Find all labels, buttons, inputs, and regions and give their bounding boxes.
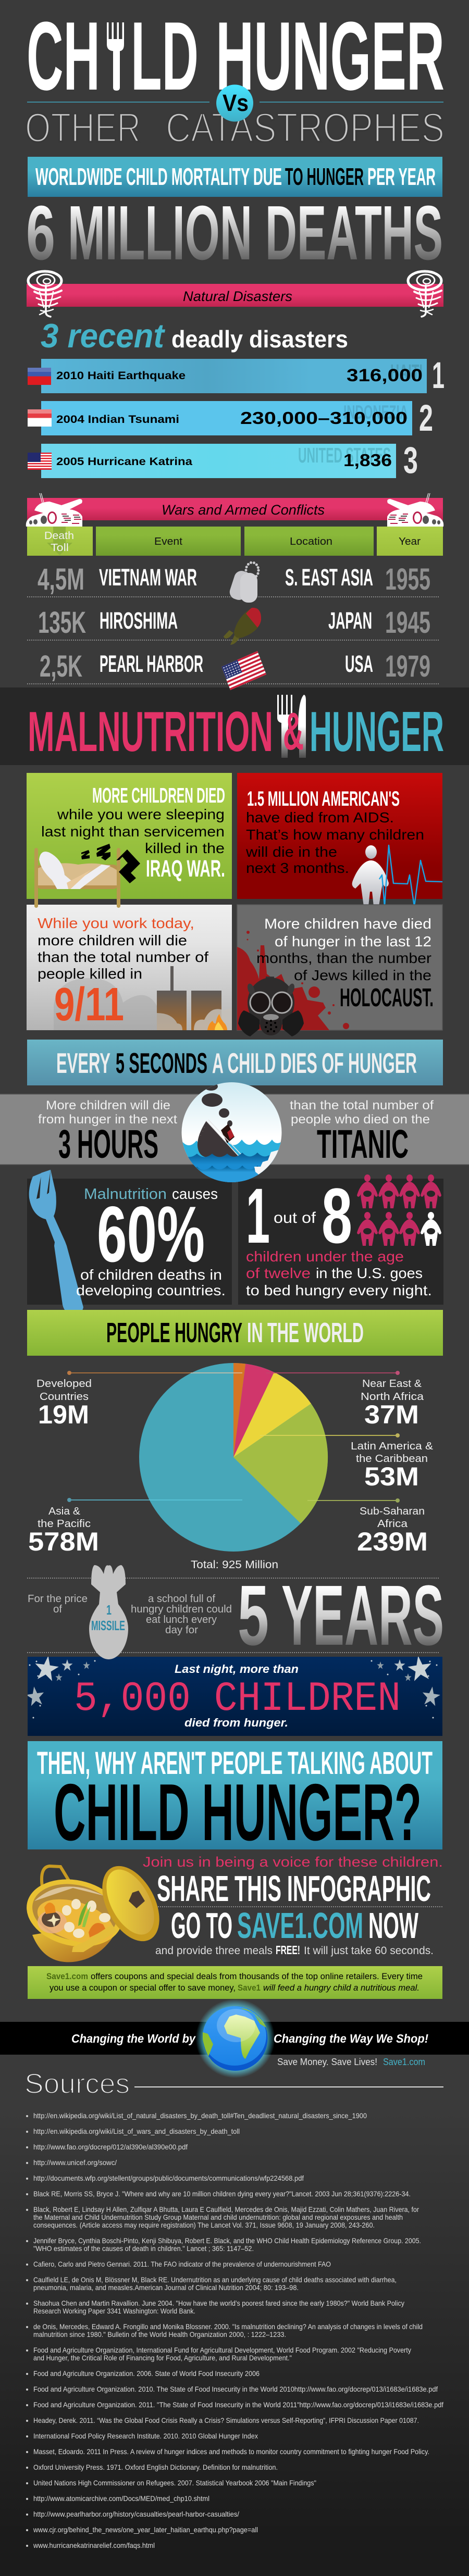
panel: about Save1: you use a coupon or special offer to save money, [50,1983,236,1993]
source list: the Maternal and Child Undernutrition Study Group Maternal and child undernutrition: global and regional exposures and health [33,2213,403,2221]
disaster bar: Tsunami: 2 [419,398,433,439]
label: near east [361,1378,424,1429]
text: price of one missile: For the price [28,1593,88,1605]
icon: sleeping bed [34,844,140,908]
call to action: Join us in being a voice for these children. [143,1854,443,1870]
panel: AIDS: have died from AIDS. [246,809,394,826]
panel: Holocaust: More children have died [264,916,431,932]
icon: bomb [224,608,261,645]
label: developed countries: 19M [38,1400,89,1429]
panel: 1 out of 8: children under the age [246,1248,404,1265]
label: near east: Near East & [362,1378,422,1390]
source list: United Nations High Commissioner on Refugees. 2007. Statistical Yearbook 2006 "Main Findings" [33,2479,316,2487]
source list: and Hunger, the Critical Role of Financing for Food, Agriculture, and Rural Development." [33,2354,292,2362]
source list: http://en.wikipedia.org/wiki/List_of_natural_disasters_by_death_toll#Ten_deadliest_natural_disasters_since_1900 [33,2111,367,2120]
icon: eight children [357,1174,441,1246]
tagline: save money save lives: Save1.com [383,2057,425,2067]
panel: about Save1 [28,1966,442,1999]
panel: 9/11 [27,905,232,1031]
text: price of one missile: eat lunch every [146,1614,217,1625]
label: near east: 37M [364,1400,419,1429]
panel: Iraq war: last night than servicemen [41,823,225,840]
disaster bar: Katrina [28,440,418,481]
panel: AIDS: next 3 months. [246,860,349,876]
headline: 6 million deaths: MILLION [68,190,252,276]
table row: Vietnam War: S. EAST ASIA [285,564,373,591]
text: price of one missile: hungry children could [131,1604,232,1615]
panel: Holocaust [237,905,442,1030]
section band: malnutrition and hunger: MALNUTRITION [28,700,273,764]
panel: last night 5,000 children: died from hunger. [184,1716,288,1729]
panel: 60 percent: causes [172,1186,218,1203]
disaster bar: Haiti: 2010 Haiti Earthquake [56,370,186,382]
panel: last night 5,000 children: Last night, more than [175,1662,299,1675]
banner: every 5 seconds: 5 SECONDS [116,1047,207,1079]
source list: http://www.pearlharbor.org/history/casualties/pearl-harbor-casualties/ [33,2510,239,2518]
source list: www.cjr.org/behind_the_news/one_year_later_haitian_earthqu.php?page=all [33,2525,258,2534]
panel: 60 percent: of children deaths in [80,1267,222,1283]
label: sub-saharan africa: Sub-Saharan [360,1506,425,1517]
panel: 60 percent: developing countries. [76,1282,226,1298]
panel: 3 hours vs Titanic: 3 HOURS [58,1122,158,1167]
label: latin america: Latin America & [351,1441,434,1452]
panel: last night 5,000 children: 5,000 CHILDREN [74,1675,401,1723]
panel: 60 percent [27,1170,232,1314]
label: latin america [351,1441,434,1491]
panel: Holocaust: of hunger in the last 12 [275,933,431,949]
banner: people hungry in the world [27,1310,443,1356]
pie total: Total: 925 Million [191,1559,278,1571]
stars left [25,1654,95,1719]
label: sub-saharan africa: 239M [357,1527,428,1556]
source list: Food and Agriculture Organization, International Fund for Agricultural Development, World Food Program. 2002 "Reducing Poverty [33,2346,411,2354]
panel: last night 5,000 children [25,1654,442,1736]
disaster bar: Katrina: 2005 Hurricane Katrina [56,456,192,468]
panel: 3 hours vs Titanic: More children will die [46,1098,170,1112]
source list: http://www.fao.org/docrep/012/al390e/al390e00.pdf [33,2143,188,2151]
panel: AIDS: That’s how many children [246,827,424,843]
table header: Location [290,536,332,547]
panel: 9/11: more children will die [38,932,187,948]
text: price of one missile: a school full of [148,1593,215,1605]
label: near east: North Africa [361,1391,424,1403]
pie chart: people hungry [139,1363,328,1552]
panel: Holocaust: of Jews killed in the [294,967,431,983]
disaster bar: Haiti: 316,000 [347,366,423,385]
panel: Iraq war: while you were sleeping [57,806,225,822]
text: price of one missile: day for [165,1624,198,1636]
label: sub-saharan africa [357,1506,428,1556]
panel: AIDS [237,773,442,899]
table row: Vietnam War: 4,5M [38,562,84,596]
panel: 3 hours vs Titanic: than the total number of [290,1098,434,1112]
title: Child Hunger: I [110,2,122,110]
banner: worldwide child mortality: TO HUNGER [285,163,364,190]
panel: about Save1: Save1.com [46,1971,88,1981]
source list: http://www.unicef.org/sowc/ [33,2158,117,2167]
subtitle: Other Catastrophes: OTHER [25,104,141,151]
table row: Hiroshima: HIROSHIMA [100,607,178,634]
table header: Death [44,530,74,542]
source list: pneumonia, malaria, and measles.American Journal of Clinical Nutrition 2004; 80: 193–98. [33,2283,299,2292]
stars right [371,1654,441,1719]
panel: Iraq war [27,773,232,899]
table header: Year [399,536,421,547]
table row: Hiroshima: 1945 [385,606,430,640]
disaster bar: Katrina: UNITED STATES [298,443,391,467]
icon: gas mask [238,977,304,1036]
table row: Hiroshima: 135K [38,606,86,640]
title: Child Hunger: LD [131,2,199,110]
source list: http://en.wikipedia.org/wiki/List_of_wars_and_disasters_by_death_toll [33,2127,240,2135]
icon: golden pot [20,1857,171,1962]
source list: International Food Policy Research Institute. 2010. 2010 Global Hunger Index [33,2432,258,2440]
panel: 1 out of 8: in the U.S. goes [316,1265,423,1281]
banner: every 5 seconds [27,1040,443,1085]
text: price of one missile [28,1593,232,1636]
source list: Food and Agriculture Organization. 2010. The State of Food Insecurity in the World 2010http://www.fao.org/docrep/013/i1683e/i1683e.pdf [33,2385,438,2393]
heading: 3 recent deadly disasters: deadly disasters [171,326,348,353]
disaster bar: Tsunami [28,398,433,439]
disaster bar: Katrina: 1,836 [343,451,392,470]
title: Child Hunger: CH [27,2,100,110]
call to action: NOW [368,1905,418,1946]
panel: 1 out of 8: out of [274,1209,316,1227]
source list: de Onis, Mercedes, Edward A. Frongillo and Monika Blossner. 2000. "Is malnutrition declining? An analysis of changes in levels of child [33,2322,423,2331]
label: latin america: the Caribbean [356,1453,428,1465]
panel: 9/11: While you work today, [38,915,194,931]
text: price of one missile: of [53,1604,62,1615]
missile section dividers [27,1578,440,1653]
panel: 9/11: people killed in [38,966,142,982]
banner: people hungry in the world: IN THE WORLD [247,1317,364,1348]
source list: "WHO estimates of the causes of death in children." Lancet ; 365: 1147–52. [33,2244,254,2253]
label: latin america: 53M [364,1462,419,1491]
table row: Hiroshima [38,606,430,640]
source list: Oxford University Press. 1971. Oxford English Dictionary. Definition for malnutrition. [33,2463,278,2471]
panel: about Save1: Save1 [238,1983,261,1993]
banner: natural disasters: Natural Disasters [183,289,292,304]
label: developed countries: Developed [36,1378,92,1390]
label: asia pacific: Asia & [48,1506,81,1517]
banner: people hungry in the world: PEOPLE HUNGRY [106,1317,242,1348]
source list: consequences. (Article access may require registration) The Lancet Vol. 371, Issue 9608, 19 January 2008, 243-260. [33,2221,375,2229]
label: asia pacific [28,1506,99,1556]
call to action: It will just take 60 seconds. [304,1945,434,1957]
label: asia pacific: 578M [28,1527,99,1556]
heading: 3 recent deadly disasters [41,317,348,355]
subtitle: Other Catastrophes [25,104,445,151]
headline: 5 years: 5 [238,1568,269,1663]
panel: 1 out of 8: 1 [246,1172,270,1259]
table row: Pearl Harbor: 2,5K [40,649,82,683]
panel: 3 hours vs Titanic: from hunger in the next [38,1112,177,1127]
icon: missile: MISSILE [91,1618,125,1633]
disaster bar: Tsunami: 230,000–310,000 [240,408,408,428]
table row: Pearl Harbor: PEARL HARBOR [100,651,203,677]
panel: Iraq war: IRAQ WAR. [146,855,225,882]
icon: missile: 1 [106,1602,112,1618]
icon: person with heartbeat [352,845,442,907]
source list: Black, Robert E, Lindsay H Allen, Zulfiqar A Bhutta, Laura E Caulfield, Mercedes de Onis, Majid Ezzati, Colin Mathers, Juan Rivera, for [33,2205,419,2214]
table header [27,527,443,556]
panel: 3 hours vs Titanic: TITANIC [317,1122,409,1167]
panel: AIDS: will die in the [245,844,337,860]
label: sub-saharan africa: Africa [377,1518,408,1530]
table row: Vietnam War: 1955 [385,562,430,596]
panel: Holocaust: months, than the number [256,950,431,966]
label: developed countries [36,1378,92,1429]
title: Child Hunger [27,2,445,110]
call to action: and provide three meals [155,1945,273,1957]
source list: http://documents.wfp.org/stellent/groups/public/documents/communications/wfp224568.pdf [33,2174,304,2182]
source list: http://www.atomicarchive.com/Docs/MED/med_chp10.shtml [33,2494,209,2503]
source list: Food and Agriculture Organization. 2011. "The State of Food Insecurity in the World 2011"http://www.fao.org/docrep/013/i1683e/i1683e.pdf [33,2400,443,2409]
panel: about Save1: offers coupons and special deals from thousands of the top online retailers. Every time [91,1971,423,1981]
leader lines and dots [67,1371,400,1503]
source list: Caulfield LE, de Onis M, Blössner M, Black RE. Undernutrition as an underlying cause of child deaths associated with diarrhea, [33,2275,397,2284]
headline: 6 million deaths: 6 [26,190,55,276]
icon: dog tags [228,562,258,603]
icon: tornado right [408,271,441,317]
band: changing the world [0,2022,469,2055]
panel: 1 out of 8 [238,1172,443,1305]
tagline: save money save lives: Save Money. Save Lives! [277,2057,377,2067]
banner: wars and armed conflicts [27,498,443,520]
icon: tank right [387,493,443,527]
icon: tank left [26,493,82,527]
icon: tornado left [28,271,61,317]
panel: 9/11: 9/11 [54,979,124,1031]
banner: worldwide child mortality: WORLDWIDE CHILD MORTALITY DUE [35,163,282,190]
panel: 60 percent: Malnutrition [84,1186,167,1203]
disaster bar: Haiti: 1 [432,355,445,396]
panel: 60 percent: 60% [97,1190,205,1279]
disaster bar: Tsunami: INDONEZIA [343,402,408,423]
table row: Pearl Harbor [40,649,430,683]
disaster bar: Haiti [28,355,445,396]
banner: worldwide child mortality [28,157,442,197]
banner: wars and armed conflicts: Wars and Armed Conflicts [162,502,325,518]
title divider with Vs badge: Vs [223,90,249,116]
panel: about Save1: will feed a hungry child a nutritious meal. [263,1983,419,1993]
source list [33,2111,443,2549]
table row: Vietnam War: VIETNAM WAR [99,564,197,591]
table header: Toll [51,542,69,554]
disaster bar: Katrina: 3 [403,440,418,481]
panel: 3 hours vs Titanic [0,1094,469,1167]
bullet markers [26,2115,28,2547]
icon: sinking Titanic globe [181,1082,284,1182]
call to action: SAVE1.COM [237,1905,363,1946]
panel: Iraq war: killed in the [145,840,225,856]
source list: Cafiero, Carlo and Pietro Gennari. 2011. The FAO indicator of the prevalence of undernourishment FAO [33,2260,331,2268]
table row: Pearl Harbor: USA [345,651,373,677]
call to action: GO TO [171,1905,232,1946]
panel: 3 hours vs Titanic: people who died on the [291,1112,430,1127]
section band: malnutrition and hunger: & [283,702,304,761]
band: changing the world: Changing the Way We Shop! [274,2032,428,2045]
panel: 9/11: than the total number of [38,949,208,965]
banner: natural disasters [27,284,443,307]
panel: 1 out of 8: 8 [322,1172,352,1259]
call to action: FREE! [276,1943,300,1957]
icon: US flag [221,651,266,690]
disaster bar: Tsunami: 2004 Indian Tsunami [56,414,179,426]
source list: Headey, Derek. 2011. “Was the Global Food Crisis Really a Crisis? Simulations versus Self-Reporting”, IFPRI Discussion Paper 01087. [33,2416,419,2424]
table header: Event [154,536,182,547]
source list: www.hurricanekatrinarelief.com/faqs.html [33,2541,155,2549]
source list: Research Working Paper 3341 Washington: World Bank. [33,2307,195,2315]
icon: missile [89,1565,128,1659]
source list: Black RE, Morris SS, Bryce J. "Where and why are 10 million children dying every year?"Lancet. 2003 Jun 28;361(9376):2226-34. [33,2190,411,2198]
panel: Iraq war: MORE CHILDREN DIED [92,783,225,807]
table row separators [27,597,440,684]
heading: 3 recent deadly disasters: 3 recent [41,317,165,355]
call to action [143,1854,443,1957]
banner: why aren't people talking [28,1741,442,1857]
panel: 1 out of 8: to bed hungry every night. [246,1282,432,1298]
source list: Food and Agriculture Organization. 2006. State of World Food Insecurity 2006 [33,2369,260,2378]
table row: Vietnam War [38,562,430,596]
disaster bar: Haiti: HAITI [390,360,423,384]
icon: earth globe [196,1999,275,2078]
panel: 1 out of 8: of twelve [246,1265,311,1281]
source list: malnutrition since 1980." Bulletin of the World Health Organization 2000, : 1222–1233. [33,2330,286,2339]
table row: Pearl Harbor: 1979 [385,649,430,683]
title divider with Vs badge [27,84,443,122]
source list: Masset, Edoardo. 2011 In Press. A review of hunger indices and methods to monitor country commitment to fighting hunger Food Policy. [33,2447,429,2456]
table row: Hiroshima: JAPAN [328,607,372,634]
band: changing the world: Changing the World by [71,2032,196,2045]
label: developed countries: Countries [40,1391,89,1403]
label: asia pacific: the Pacific [38,1518,91,1530]
source list: Jennifer Bryce, Cynthia Boschi-Pinto, Kenji Shibuya, Robert E. Black, and the WHO Child Health Epidemiology Reference Group. 2005. [33,2236,421,2245]
source list: Shaohua Chen and Martin Ravallion. June 2004. "How have the world’s poorest fared since the early 1980s?" World Bank Policy [33,2299,404,2307]
heading: sources: Sources [24,2068,130,2099]
banner: every 5 seconds: EVERY [56,1047,110,1079]
